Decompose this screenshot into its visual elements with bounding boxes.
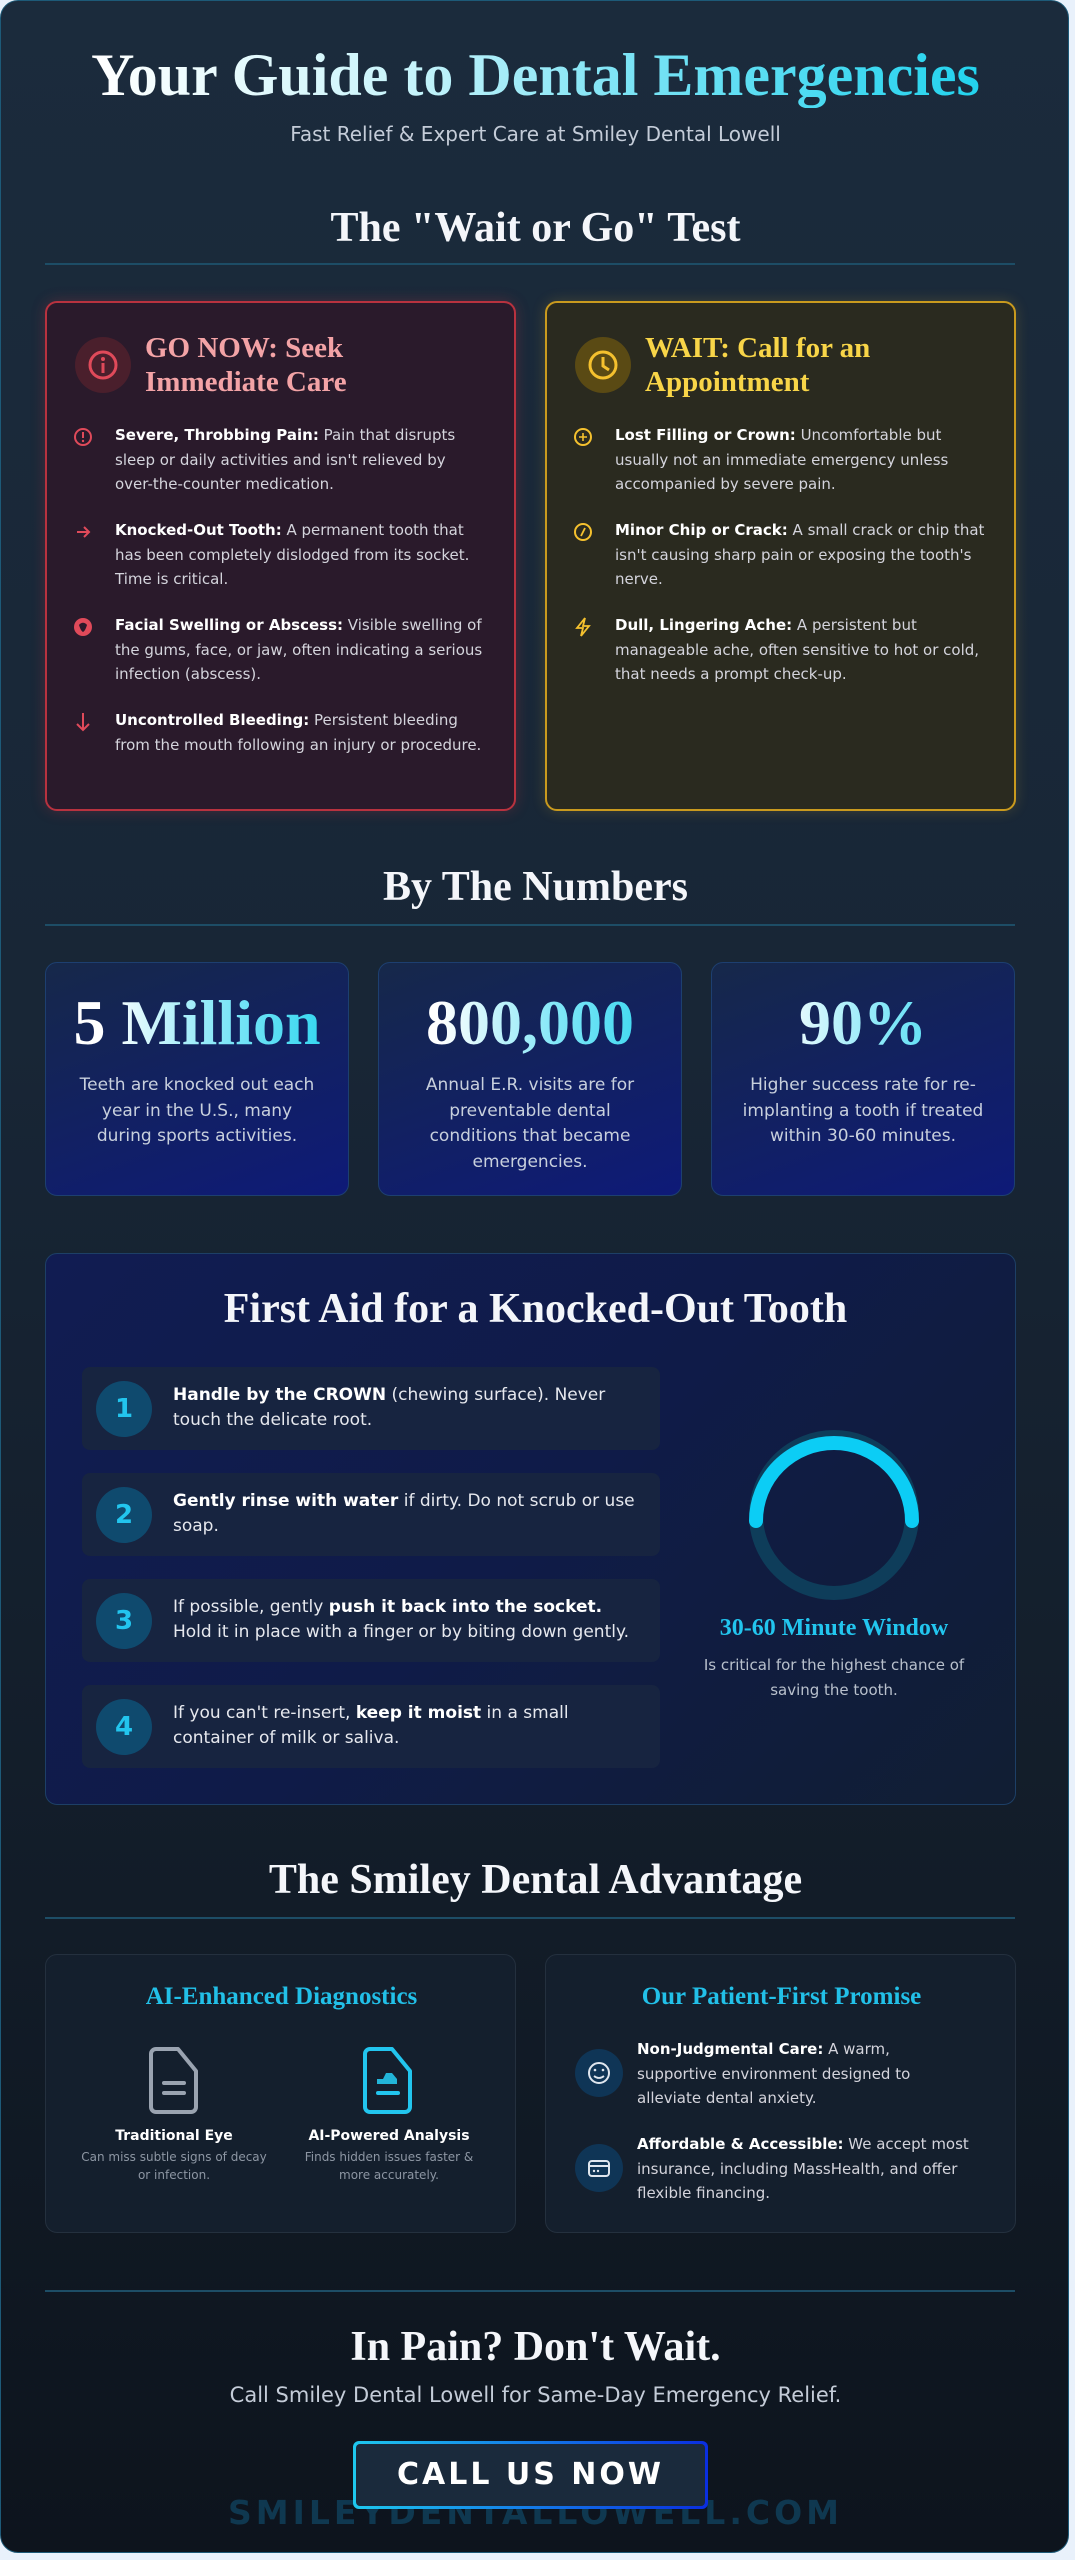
heading: go now <box>145 332 347 398</box>
step 3: Hold it in place with a finger or by biting down gently. <box>173 1622 629 1642</box>
stat: 90%: Higher success rate for re-implanting a tooth if treated within 30-60 minutes. <box>743 1075 983 1146</box>
step 2: 2 <box>115 1500 133 1530</box>
step 3: 3 <box>115 1606 133 1636</box>
heading: wait or go: The "Wait or Go" Test <box>331 205 740 251</box>
icon: traditional eye <box>149 2047 198 2114</box>
heading: promise: Our Patient-First Promise <box>642 1983 921 2010</box>
panel: AI diagnostics <box>45 1954 516 2233</box>
stat: 800,000: Annual E.R. visits are for preventable dental conditions that became emergencies. <box>426 1075 634 1172</box>
watermark: SMILEYDENTALLOWELL.COM <box>228 2493 843 2532</box>
stat: 5 million: 5 Million <box>73 987 321 1058</box>
step 4: 4 <box>115 1712 133 1742</box>
item: pain: Severe, Throbbing Pain: Pain that disrupts sleep or daily activities and isn't relieved by over-the-counter medication. <box>115 426 455 493</box>
step 2 <box>82 1473 660 1556</box>
item: chip: Minor Chip or Crack: A small crack or chip that isn't causing sharp pain or exposing the tooth's nerve. <box>615 521 984 588</box>
step 1 <box>82 1367 660 1450</box>
stat: 5 million: Teeth are knocked out each year in the U.S., many during sports activities. <box>80 1075 314 1146</box>
item: ache: Dull, Lingering Ache: A persistent but manageable ache, often sensitive to hot or cold, that needs a prompt check-up. <box>615 616 979 683</box>
ring caption: 30-60 Minute Window <box>720 1615 948 1641</box>
heading: numbers: By The Numbers <box>383 864 688 910</box>
step 1: Handle by the CROWN (chewing surface). Never touch the delicate root. <box>173 1385 605 1430</box>
stat: 800,000: 800,000 <box>426 987 634 1058</box>
item: bleeding: Uncontrolled Bleeding: Persistent bleeding from the mouth following an injury or procedure. <box>115 711 481 754</box>
item: knocked out: Knocked-Out Tooth: A permanent tooth that has been completely dislodged from its socket. Time is critical. <box>115 521 469 588</box>
step 2: Gently rinse with water if dirty. Do not scrub or use soap. <box>173 1491 635 1536</box>
title: Your Guide to Dental Emergencies <box>91 42 980 108</box>
stat: 90%: 90% <box>799 987 927 1058</box>
cta subtitle: Call Smiley Dental Lowell for Same-Day Emergency Relief. <box>230 2383 841 2407</box>
icon: info <box>75 337 131 393</box>
panel: go now <box>45 301 516 811</box>
heading: go now: GO NOW: Seek <box>145 332 343 364</box>
item: non-judgmental: Non-Judgmental Care: A warm, supportive environment designed to alleviate dental anxiety. <box>637 2040 910 2107</box>
ring description: Is critical for the highest chance of saving the tooth. <box>704 1656 964 1699</box>
icon: smile <box>575 2049 623 2097</box>
stat: 800,000 <box>378 962 682 1196</box>
heading: wait: WAIT: Call for an <box>645 332 870 364</box>
heading: in pain: In Pain? Don't Wait. <box>350 2324 721 2370</box>
heading: first aid: First Aid for a Knocked-Out Tooth <box>224 1286 847 1332</box>
panel: first aid <box>45 1253 1016 1805</box>
label: AI: AI-Powered Analysis <box>308 2128 470 2144</box>
step 3 <box>82 1579 660 1662</box>
label: AI <box>305 2128 473 2182</box>
step 3: If possible, gently push it back into the socket. <box>173 1597 602 1617</box>
label: traditional <box>81 2128 267 2182</box>
chart: ring timer <box>749 1430 919 1600</box>
label: traditional: Can miss subtle signs of decay or infection. <box>81 2150 267 2182</box>
heading: advantage: The Smiley Dental Advantage <box>269 1857 802 1903</box>
button: call us now <box>353 2441 708 2509</box>
heading: go now: Immediate Care <box>145 366 347 398</box>
icon: clock <box>575 337 631 393</box>
step 1: 1 <box>115 1394 133 1424</box>
subtitle: Fast Relief & Expert Care at Smiley Dental Lowell <box>290 122 781 146</box>
heading: wait: Appointment <box>645 366 809 398</box>
icon: AI <box>363 2047 412 2114</box>
label: AI: Finds hidden issues faster & more accurately. <box>305 2150 473 2182</box>
stat: 90% <box>711 962 1015 1196</box>
panel: wait <box>545 301 1016 811</box>
step 4 <box>82 1685 660 1768</box>
item: affordable: Affordable & Accessible: We accept most insurance, including MassHealth, and offer flexible financing. <box>637 2135 969 2202</box>
button: call us now: CALL US NOW <box>397 2457 664 2492</box>
stat: 5 million <box>45 962 349 1196</box>
heading: AI: AI-Enhanced Diagnostics <box>146 1983 417 2010</box>
step 4: If you can't re-insert, keep it moist in a small container of milk or saliva. <box>173 1703 569 1748</box>
label: traditional: Traditional Eye <box>115 2128 233 2144</box>
panel: patient first <box>545 1954 1016 2233</box>
heading: wait <box>645 332 870 398</box>
item: filling: Lost Filling or Crown: Uncomfortable but usually not an immediate emergency unless accompanied by severe pain. <box>615 426 948 493</box>
item: swelling: Facial Swelling or Abscess: Visible swelling of the gums, face, or jaw, often indicating a serious infection (abscess). <box>115 616 482 683</box>
icon: card <box>575 2144 623 2192</box>
